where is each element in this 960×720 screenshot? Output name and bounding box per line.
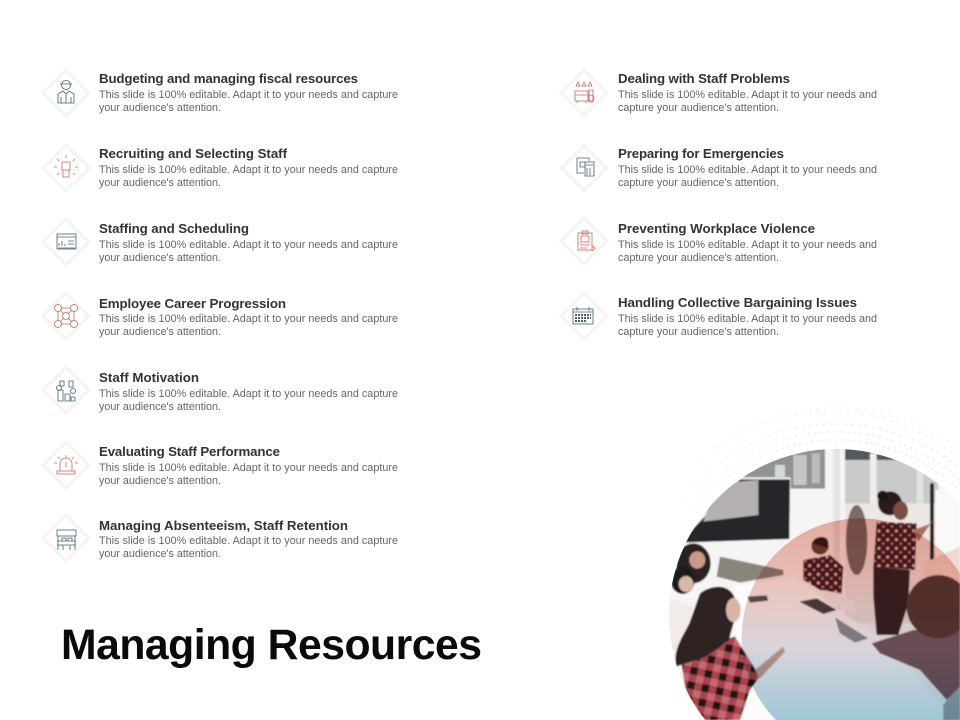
icon: team at desk: [561, 70, 607, 116]
title: Managing Resources: [61, 621, 482, 669]
heading: Staffing and Scheduling: [99, 221, 249, 236]
heading: Preparing for Emergencies: [618, 146, 784, 161]
dotted halo behind photo: [738, 407, 960, 488]
item: evaluating: [43, 442, 398, 488]
description: This slide is 100% editable. Adapt it to your needs and: [618, 239, 877, 251]
heading: Staff Motivation: [99, 370, 199, 385]
item: staff problems: [561, 70, 877, 116]
item: career: [43, 293, 398, 339]
description: capture your audience's attention.: [618, 326, 779, 338]
description: This slide is 100% editable. Adapt it to your needs and capture: [99, 388, 398, 400]
description: your audience's attention.: [99, 401, 221, 413]
icon: clipboard with badge: [561, 218, 607, 264]
icon: calendar: [561, 293, 607, 339]
description: This slide is 100% editable. Adapt it to your needs and: [618, 313, 877, 325]
icon: network nodes: [43, 293, 89, 339]
item: absenteeism: [43, 515, 398, 561]
item: workplace violence: [561, 218, 877, 264]
icon: dashboard window: [43, 219, 89, 265]
pink-to-blue overlay circle: [742, 518, 960, 720]
description: capture your audience's attention.: [618, 177, 779, 189]
description: capture your audience's attention.: [618, 252, 779, 264]
description: This slide is 100% editable. Adapt it to your needs and capture: [99, 313, 398, 325]
description: This slide is 100% editable. Adapt it to your needs and: [618, 164, 877, 176]
description: This slide is 100% editable. Adapt it to your needs and capture: [99, 462, 398, 474]
item: motivation: [43, 367, 398, 413]
item: emergencies: [561, 145, 877, 191]
heading: Recruiting and Selecting Staff: [99, 146, 288, 161]
description: This slide is 100% editable. Adapt it to your needs and capture: [99, 89, 398, 101]
table: [832, 606, 858, 624]
left seated people: [667, 543, 711, 650]
description: your audience's attention.: [99, 326, 221, 338]
heading: Preventing Workplace Violence: [618, 221, 815, 236]
heading: Handling Collective Bargaining Issues: [618, 295, 857, 310]
description: your audience's attention.: [99, 177, 221, 189]
description: This slide is 100% editable. Adapt it to your needs and capture: [99, 239, 398, 251]
description: your audience's attention.: [99, 252, 221, 264]
icon: plan and calculator: [561, 145, 607, 191]
description: your audience's attention.: [99, 102, 221, 114]
foreground woman in plaid: [675, 587, 785, 720]
left column of topics: [43, 70, 398, 561]
heading: Evaluating Staff Performance: [99, 444, 280, 459]
icon: alarm siren: [43, 442, 89, 488]
item: budgeting: [43, 70, 398, 116]
heading: Employee Career Progression: [99, 296, 286, 311]
icon: storefront: [43, 515, 89, 561]
description: This slide is 100% editable. Adapt it to your needs and capture: [99, 164, 398, 176]
foreground person with curly hair: [872, 575, 960, 700]
heading: Budgeting and managing fiscal resources: [99, 71, 358, 86]
description: your audience's attention.: [99, 548, 221, 560]
seated woman: [802, 536, 844, 607]
standing presenter: [873, 491, 934, 635]
item: collective bargaining: [561, 293, 877, 339]
heading: Managing Absenteeism, Staff Retention: [99, 518, 348, 533]
desk items: [799, 598, 837, 614]
description: This slide is 100% editable. Adapt it to your needs and: [618, 89, 877, 101]
icon: people and podium: [43, 367, 89, 413]
photo: team meeting in circle: [660, 440, 960, 720]
item: staffing: [43, 219, 398, 265]
icon: manager: [43, 70, 89, 116]
right column of topics: [561, 70, 877, 339]
heading: Dealing with Staff Problems: [618, 71, 790, 86]
icon: raised fist: [43, 145, 89, 191]
description: This slide is 100% editable. Adapt it to your needs and capture: [99, 535, 398, 547]
description: capture your audience's attention.: [618, 102, 779, 114]
item: recruiting: [43, 145, 398, 191]
description: your audience's attention.: [99, 475, 221, 487]
